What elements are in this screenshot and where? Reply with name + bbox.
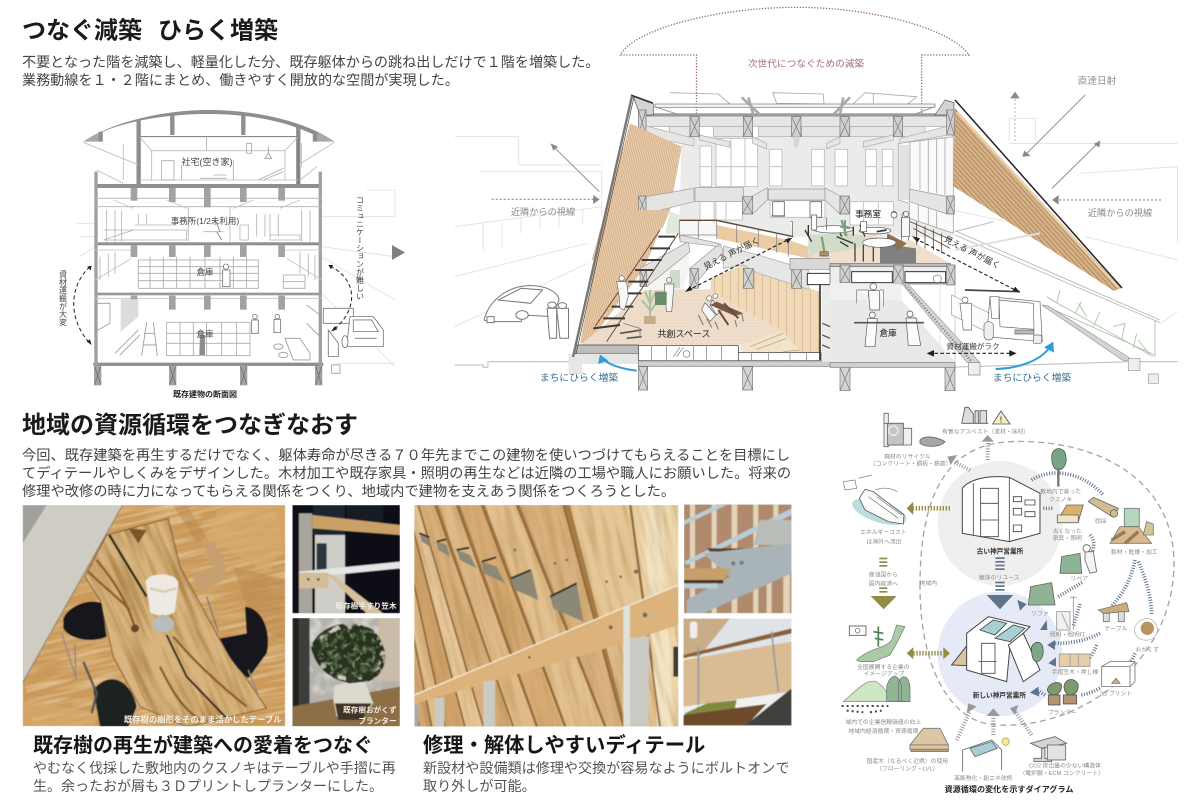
dashed region loop xyxy=(920,441,1174,725)
icon: camphor tree xyxy=(1052,449,1066,487)
diagram labels: 高断熱化・創エネ改修 xyxy=(954,774,1013,782)
diagram labels: 廃材のリサイクル xyxy=(884,452,931,460)
diagram labels: 域内での企業信頼価値の向上 xyxy=(845,718,921,726)
diagram labels: プランター xyxy=(1048,709,1077,717)
main beam band xyxy=(646,116,948,149)
dashed arrows xyxy=(915,238,1018,353)
icon: 3D printer xyxy=(1102,662,1135,687)
diagram labels: CO2 排出量の少ない構造体 xyxy=(1029,761,1101,769)
label: company housing: 社宅(空き家) xyxy=(182,156,232,167)
icon: forest and hills xyxy=(842,677,910,712)
truck xyxy=(323,308,383,357)
middle beams xyxy=(695,188,947,214)
label: direct sunlight: 直達日射 xyxy=(1078,74,1117,87)
diagram labels: 国内経済へ xyxy=(869,580,898,588)
top rails xyxy=(633,97,954,116)
heading: top section title: ひらく増築 xyxy=(158,18,278,44)
truck xyxy=(952,290,1042,343)
back concrete wall xyxy=(679,137,953,237)
diagram labels: 敷地内で育った xyxy=(1040,487,1081,495)
right wood screen xyxy=(953,100,1122,291)
diagram labels: テーブル xyxy=(1104,625,1128,633)
icon: table xyxy=(1098,603,1129,622)
top columns xyxy=(638,110,954,137)
left wood lower xyxy=(580,210,670,343)
text block: top section intro: 不要となった階を減築し、軽量化した分、既存躯体からの跳ね出しだけで１階を増築した。 xyxy=(22,54,599,70)
circle: new office xyxy=(938,592,1062,716)
round table xyxy=(855,238,896,262)
photo: table xyxy=(22,505,286,726)
hatched shutter xyxy=(121,299,138,332)
icon: asbestos warning xyxy=(962,407,1010,425)
left mid beam xyxy=(646,188,694,214)
text block: reuse: 生。余ったおが屑も３Ｄプリントしプランターにした。 xyxy=(33,778,383,794)
counter xyxy=(880,243,916,263)
flow arrows: olive dotted xyxy=(907,502,950,659)
diagram labels: イメージアップ xyxy=(864,671,905,678)
lower left part xyxy=(569,210,842,390)
flow arrows: reuse of structure xyxy=(987,557,1013,609)
top floor box xyxy=(139,137,298,185)
photo group: reused camphor tree xyxy=(22,505,400,726)
people and plants office xyxy=(837,211,909,247)
label: new office: 新しい神戸営業所 xyxy=(973,691,1026,700)
diagram labels: 全国展開する企業の xyxy=(857,663,910,671)
label: see and hear left: 見える 声が届く xyxy=(702,235,761,272)
diagram labels: リペア xyxy=(1071,576,1088,583)
heading: reuse: 既存樹の再生が建築への愛着をつなぐ xyxy=(33,733,373,757)
label: reduction for next generation: 次世代につなぐための減築 xyxy=(748,57,864,70)
photo: handrail xyxy=(292,505,400,613)
diagram labels: おがくず xyxy=(1136,645,1159,653)
icon: timber stack xyxy=(910,728,948,752)
diagram labels: エネルギーコスト xyxy=(860,529,907,536)
icon: recycling factory xyxy=(884,413,945,447)
label: open extension right: まちにひらく増築 xyxy=(993,371,1071,384)
heading: top section title: つなぐ減築 xyxy=(22,18,142,44)
drain xyxy=(332,365,340,373)
diagram labels: （コンクリート・銅板・鉄筋） xyxy=(870,460,951,468)
text block: regional resource intro: 今回、既存建築を再生するだけでなく、躯体寿命が尽きる７０年先までこの建物を使いつづけてもらえることを目標にし xyxy=(22,447,790,464)
upper slab edge xyxy=(790,258,840,269)
label: materials transport: 資材運搬が大変 xyxy=(58,269,68,327)
label: open extension left: まちにひらく増築 xyxy=(540,371,618,384)
stair xyxy=(593,230,678,342)
text block: regional resource intro: てディテールやしくみをデザインした。木材加工や既存家具・照明の再生などは近隣の工場や職人にお願いした。将来の xyxy=(22,464,791,482)
slope and brace lines xyxy=(955,222,1160,357)
slab and base columns xyxy=(830,363,955,391)
label: storage 2F: 倉庫 xyxy=(196,267,214,277)
heading: repair: 修理・解体しやすいディテール xyxy=(423,733,705,757)
right window wall xyxy=(898,137,953,233)
diagram labels: 伐採 xyxy=(1095,517,1107,525)
icon: Japan map xyxy=(849,625,905,662)
office floor furnishings xyxy=(100,207,315,280)
roof solar frames xyxy=(670,93,917,105)
left concrete beams xyxy=(640,235,723,287)
dashed arrows xyxy=(74,266,352,343)
diagram labels: 3D プリント xyxy=(1100,691,1132,698)
flow arrows: blue dotted xyxy=(1032,473,1152,695)
resource cycle diagram xyxy=(842,407,1174,782)
pedestrians xyxy=(547,302,568,338)
diagram labels: （電炉鋼・ECM コンクリート） xyxy=(1019,769,1104,777)
label: office room: 事務室 xyxy=(855,208,881,219)
hill ramp and plants xyxy=(1042,305,1134,361)
common floor xyxy=(581,289,782,345)
diagram labels: は海外へ流出 xyxy=(867,538,902,546)
flow arrows: oil to domestic xyxy=(871,558,897,609)
label: neighbor sight right: 近隣からの視線 xyxy=(1088,207,1152,218)
caption: cycle diagram: 資源循環の変化を示すダイアグラム xyxy=(945,784,1073,794)
icon: asbestos warning: ! xyxy=(1000,416,1002,425)
icon: old building xyxy=(962,477,1040,542)
caption: existing section: 既存建物の断面図 xyxy=(173,389,237,399)
columns band xyxy=(840,265,955,285)
windows xyxy=(700,138,893,232)
icon: logs xyxy=(1088,497,1118,517)
flow arrows: grey dotted xyxy=(953,442,1032,740)
text block: repair: 取り外しが可能。 xyxy=(423,778,536,794)
diagram labels: クスノキ xyxy=(1049,496,1072,503)
diagram labels: ソファ xyxy=(1031,611,1049,618)
blue arrow right xyxy=(996,347,1050,369)
label: office: 事務所(1/2未利用) xyxy=(171,216,239,226)
left outer wall line xyxy=(573,95,653,357)
icon: sawmill xyxy=(1110,508,1153,543)
label: see and hear right: 見える 声が届く xyxy=(943,234,1002,271)
diagram labels: 古くなった xyxy=(1053,527,1082,535)
icon: sawdust xyxy=(1135,619,1157,640)
diagram labels: 地域内経済循環・資源循環 xyxy=(848,727,918,735)
icon: rail xyxy=(1059,654,1090,667)
storage wall edge xyxy=(807,273,842,362)
diagram labels: 産油国から xyxy=(869,571,898,579)
label: storage: 倉庫 xyxy=(879,327,897,338)
label: common space: 共創スペース xyxy=(658,329,710,339)
label: old office: 古い神戸営業所 xyxy=(977,546,1024,555)
workers xyxy=(223,264,281,333)
circle: old office xyxy=(938,461,1062,586)
overlay caption: プランター xyxy=(358,715,397,725)
plant and planter xyxy=(642,290,667,324)
photo: stair and slats xyxy=(414,505,678,727)
icon: low carbon structure xyxy=(1031,737,1067,762)
rail xyxy=(910,222,952,253)
concrete beam over partition xyxy=(723,246,808,289)
upper railing and wood panel xyxy=(679,220,808,258)
context: city, dome and sight lines xyxy=(455,7,1178,367)
photo group: repairable details xyxy=(414,504,792,727)
people xyxy=(617,276,722,322)
behind-stair void xyxy=(645,252,690,290)
office tables and people xyxy=(791,211,908,256)
storage floor xyxy=(830,300,955,363)
photo: planter xyxy=(292,618,400,727)
diagram labels: 手摺笠木・押し棒 xyxy=(1052,668,1098,676)
diagram labels: 地域内 xyxy=(920,579,937,587)
office floor xyxy=(830,240,950,263)
arrow: to renovated section xyxy=(392,245,405,260)
icon: lighting xyxy=(1057,597,1077,630)
base wall and slab xyxy=(569,345,842,390)
floor slabs and walls xyxy=(93,172,323,385)
icon: new building xyxy=(952,617,1040,682)
car xyxy=(484,286,559,323)
cross-section column X marks xyxy=(95,367,322,385)
diagram labels: 有害なアスベスト（塗材・床材） xyxy=(942,427,1029,435)
columns xyxy=(94,188,322,385)
office carpet and floor xyxy=(808,233,893,260)
icon: planters xyxy=(1047,679,1078,705)
left wood wall xyxy=(592,123,682,260)
icon: sofa xyxy=(1028,583,1055,605)
text block: reuse: やむなく伐採した敷地内のクスノキはテーブルや手摺に再 xyxy=(33,760,396,776)
icon: solar roof xyxy=(963,738,1009,772)
text block: repair: 新設材や設備類は修理や交換が容易なようにボルトオンで xyxy=(423,760,789,776)
overlay caption: 既存樹の樹形をそのまま活かしたテーブル xyxy=(124,715,282,725)
shelves xyxy=(138,257,305,356)
diagram labels: 躯体のリユース xyxy=(979,574,1020,582)
interior upper part xyxy=(592,93,954,260)
label: storage 1F: 倉庫 xyxy=(196,329,214,339)
diagram labels: （フローリング・LVL） xyxy=(876,764,939,772)
lower right part xyxy=(830,211,1160,391)
icon: old furniture xyxy=(1057,505,1083,523)
storage floor details xyxy=(95,303,320,360)
photo: steel stair xyxy=(684,504,792,613)
lane ramp xyxy=(902,283,980,363)
pale green tree xyxy=(665,212,680,234)
overlay caption: 既存樹手すり笠木 xyxy=(335,600,397,610)
photo: suspended panel xyxy=(683,618,792,726)
text block: top section intro: 業務動線を１・２階にまとめ、働きやすく開放的な空間が実現した。 xyxy=(22,72,459,88)
common table xyxy=(698,302,743,329)
section drawing: renovated building xyxy=(455,7,1178,391)
label: communication: コミュニケーションが難しい xyxy=(356,196,364,300)
icon: tree beside new building xyxy=(1031,642,1043,662)
diagram labels: 国産木（なるべく近県）の使用 xyxy=(867,757,948,765)
diagram labels: 製材・乾燥・加工 xyxy=(1111,548,1158,556)
diagram labels: 家具・照明 xyxy=(1053,534,1082,542)
blue arrow left xyxy=(602,358,637,371)
wood partition xyxy=(711,265,819,359)
workers in storage xyxy=(854,283,924,347)
label: easier transport: 資材運搬がラク xyxy=(946,341,1000,351)
diagram labels: 照明・照明灯 xyxy=(1050,631,1085,639)
icon: tanker ship xyxy=(843,475,910,531)
heading: regional resource section: 地域の資源循環をつなぎなおす xyxy=(22,411,358,439)
overlay caption: 既存樹おがくず xyxy=(343,705,397,715)
icon: repair chair xyxy=(1060,545,1097,573)
stepped platform xyxy=(740,331,805,357)
text block: regional resource intro: 修理や改修の時に力になってもらえる関係をつくり、地域内で建物を支えあう関係をつくろうとした。 xyxy=(22,483,675,500)
office slab band xyxy=(830,263,955,284)
partition and beam columns xyxy=(640,268,802,288)
section drawing: existing building xyxy=(74,110,395,385)
diagram labels xyxy=(845,427,1159,782)
label: neighbor sight left: 近隣からの視線 xyxy=(511,206,575,217)
roof arc xyxy=(83,110,334,185)
dashed arrow see and hear xyxy=(687,239,790,291)
